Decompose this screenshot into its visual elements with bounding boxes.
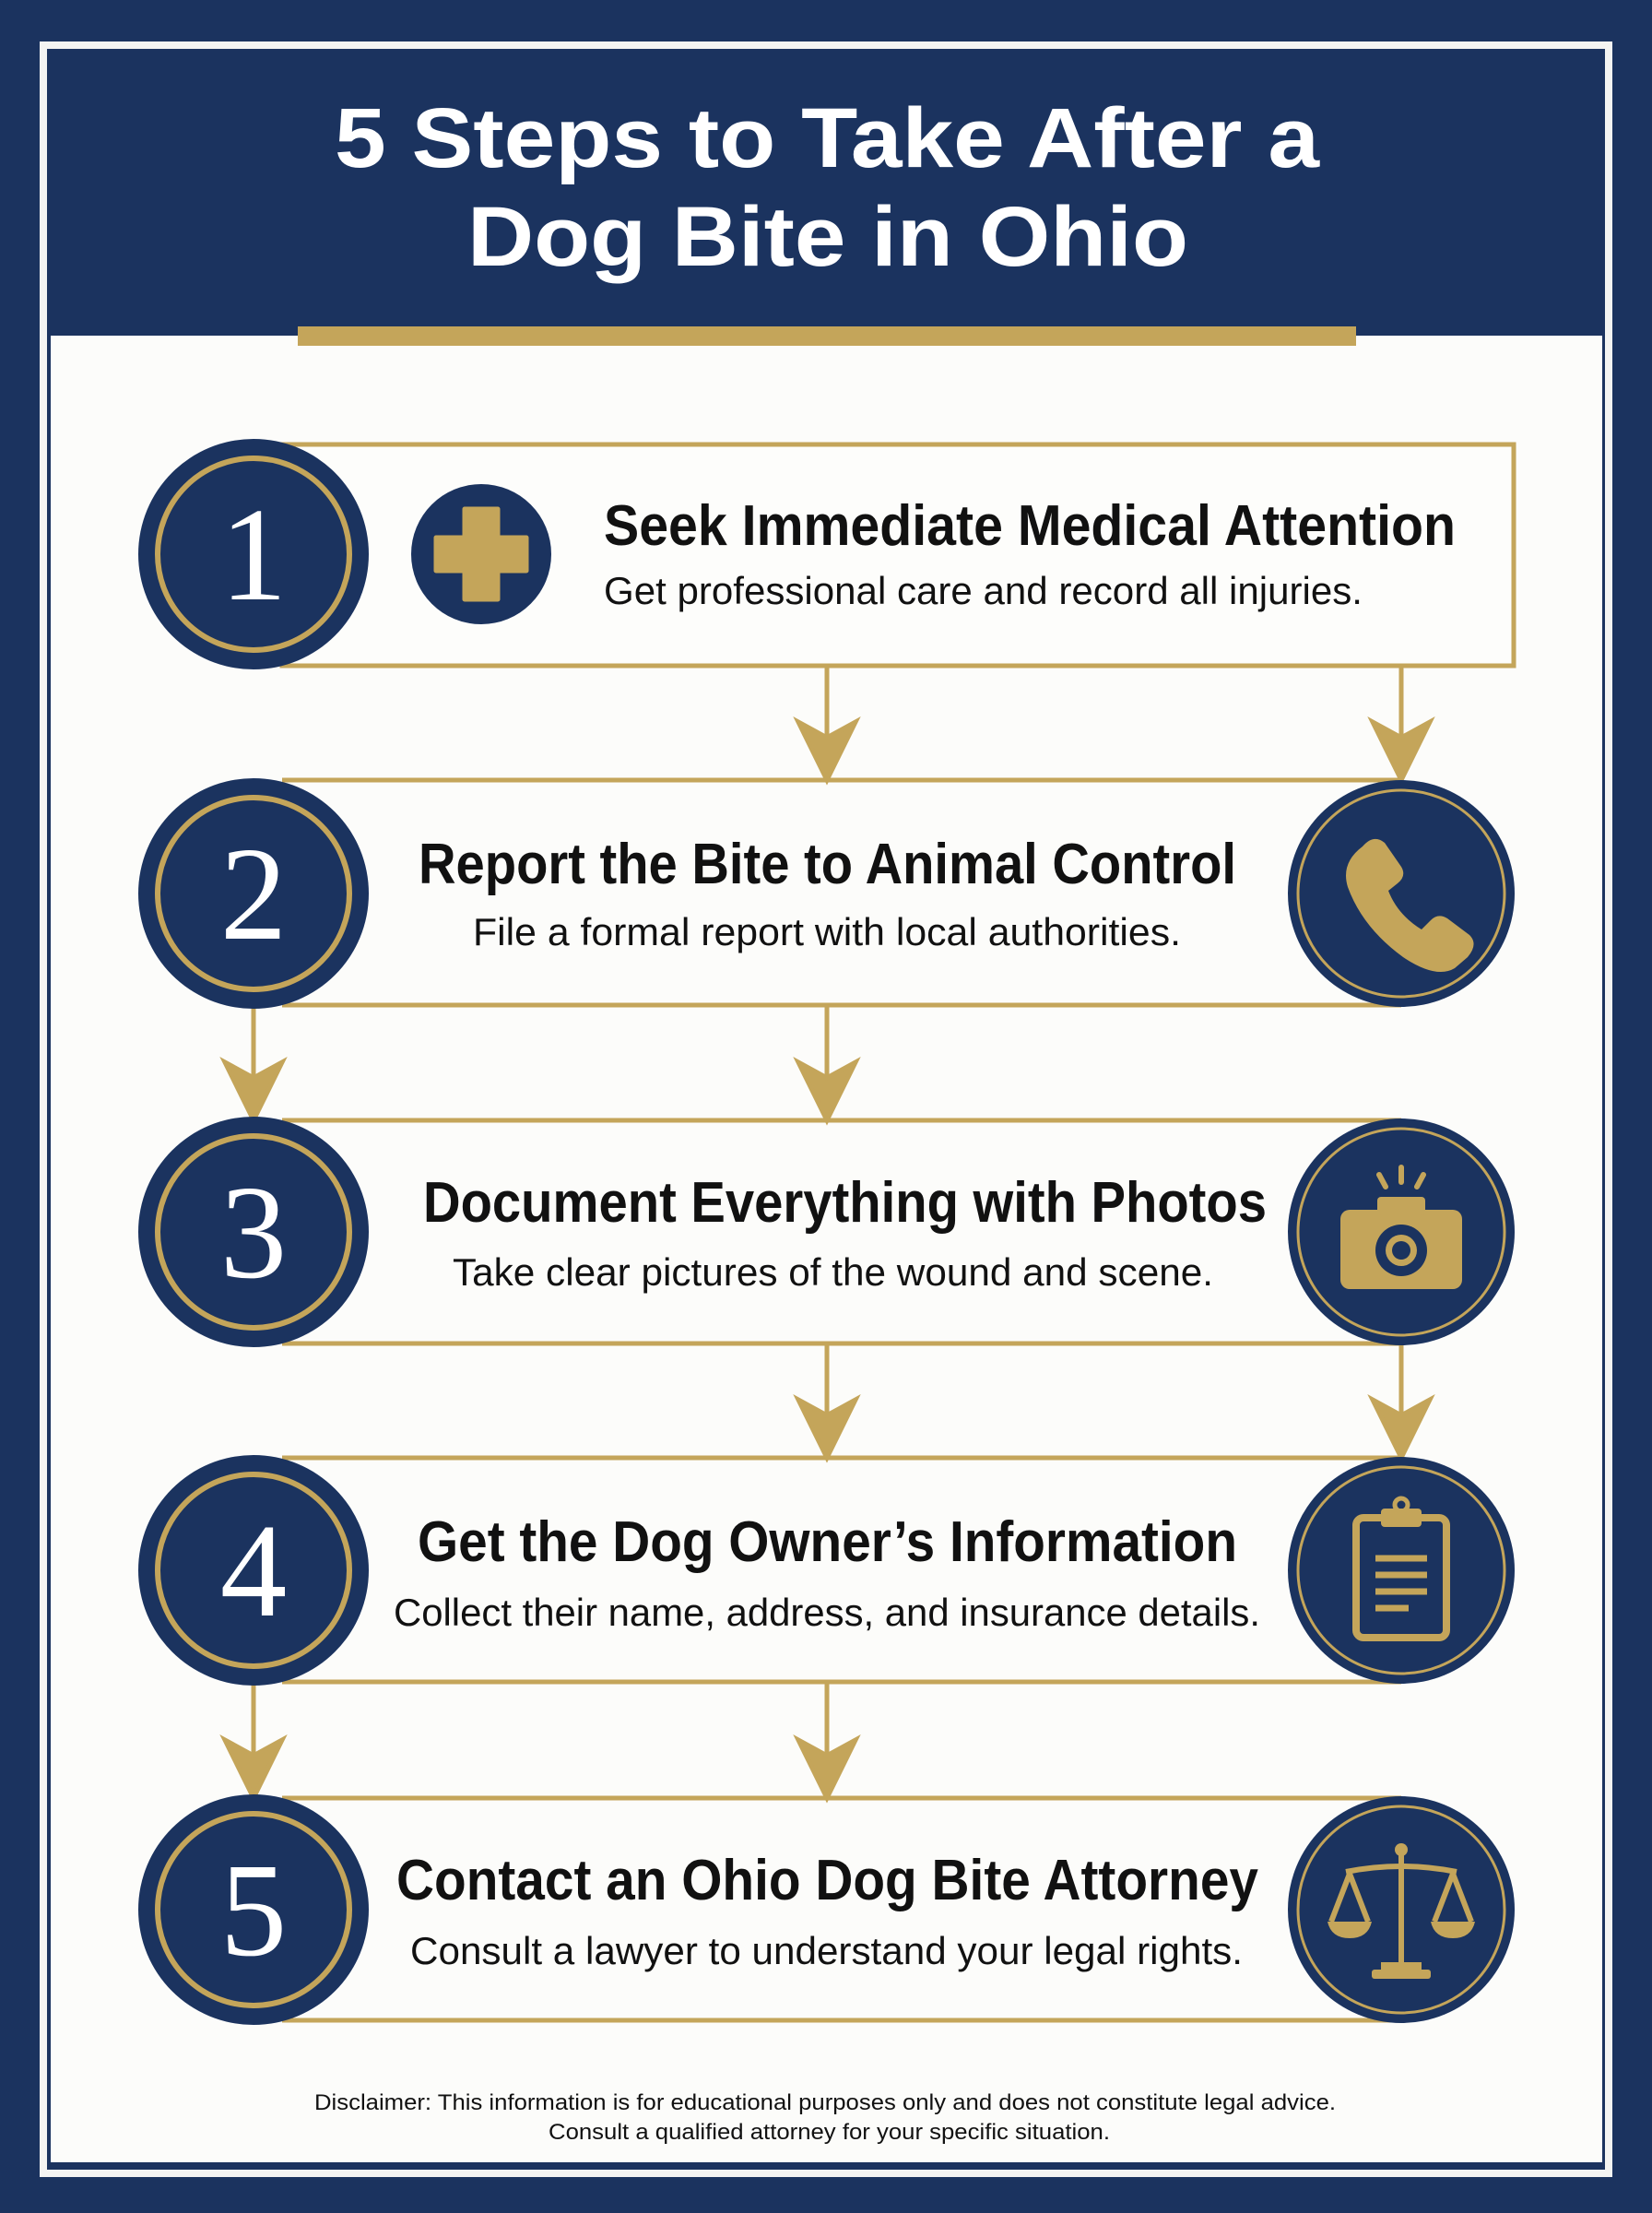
step 4 text: Collect their name, address, and insurance details.	[394, 1591, 1260, 1634]
disclaimer	[314, 2090, 1336, 2145]
step 5	[138, 1794, 1515, 2025]
number circle 2: 2	[220, 821, 287, 968]
disclaimer: Disclaimer: This information is for educational purposes only and does not constitute legal advice.	[314, 2090, 1336, 2115]
step 2 text: File a formal report with local authorities.	[473, 910, 1181, 953]
icon: clipboard	[1288, 1457, 1515, 1684]
step 2 text: Report the Bite to Animal Control	[419, 833, 1236, 896]
number circle 2	[138, 778, 369, 1009]
step 4	[138, 1455, 1515, 1686]
title: 5 Steps to Take After a	[335, 91, 1320, 185]
step 1 text: Seek Immediate Medical Attention	[604, 494, 1456, 558]
arrows	[225, 666, 1430, 1798]
icon: phone	[1288, 780, 1515, 1007]
step 1 text	[604, 494, 1456, 612]
number circle 5: 5	[220, 1837, 287, 1984]
step 1 text: Get professional care and record all injuries.	[604, 569, 1363, 612]
number circle 3: 3	[220, 1159, 287, 1307]
icon: medical cross	[411, 484, 551, 624]
header panel	[51, 53, 1602, 336]
gold bar	[298, 326, 1356, 346]
number circle 1	[138, 439, 369, 669]
number circle 4: 4	[220, 1497, 287, 1645]
step 5 text: Consult a lawyer to understand your legal rights.	[410, 1929, 1243, 1972]
number circle 1: 1	[220, 481, 287, 629]
title	[335, 91, 1320, 284]
step 4 text: Get the Dog Owner’s Information	[418, 1510, 1237, 1574]
title: Dog Bite in Ohio	[467, 190, 1188, 284]
step 3 text: Take clear pictures of the wound and scene.	[453, 1250, 1213, 1294]
icon: camera	[1288, 1118, 1515, 1345]
step 3	[138, 1117, 1515, 1347]
disclaimer: Consult a qualified attorney for your specific situation.	[549, 2120, 1110, 2145]
step 3 text: Document Everything with Photos	[423, 1171, 1267, 1235]
content panel	[51, 336, 1602, 2162]
number circle 5	[138, 1794, 369, 2025]
number circle 3	[138, 1117, 369, 1347]
step 5 text: Contact an Ohio Dog Bite Attorney	[396, 1849, 1258, 1912]
step 1	[138, 439, 1514, 669]
number circle 4	[138, 1455, 369, 1686]
step 2	[138, 778, 1515, 1009]
step 5 text	[396, 1849, 1258, 1972]
step 3 text	[423, 1171, 1267, 1294]
step 2 text	[419, 833, 1236, 953]
icon: scales	[1288, 1796, 1515, 2023]
step 4 text	[394, 1510, 1260, 1634]
